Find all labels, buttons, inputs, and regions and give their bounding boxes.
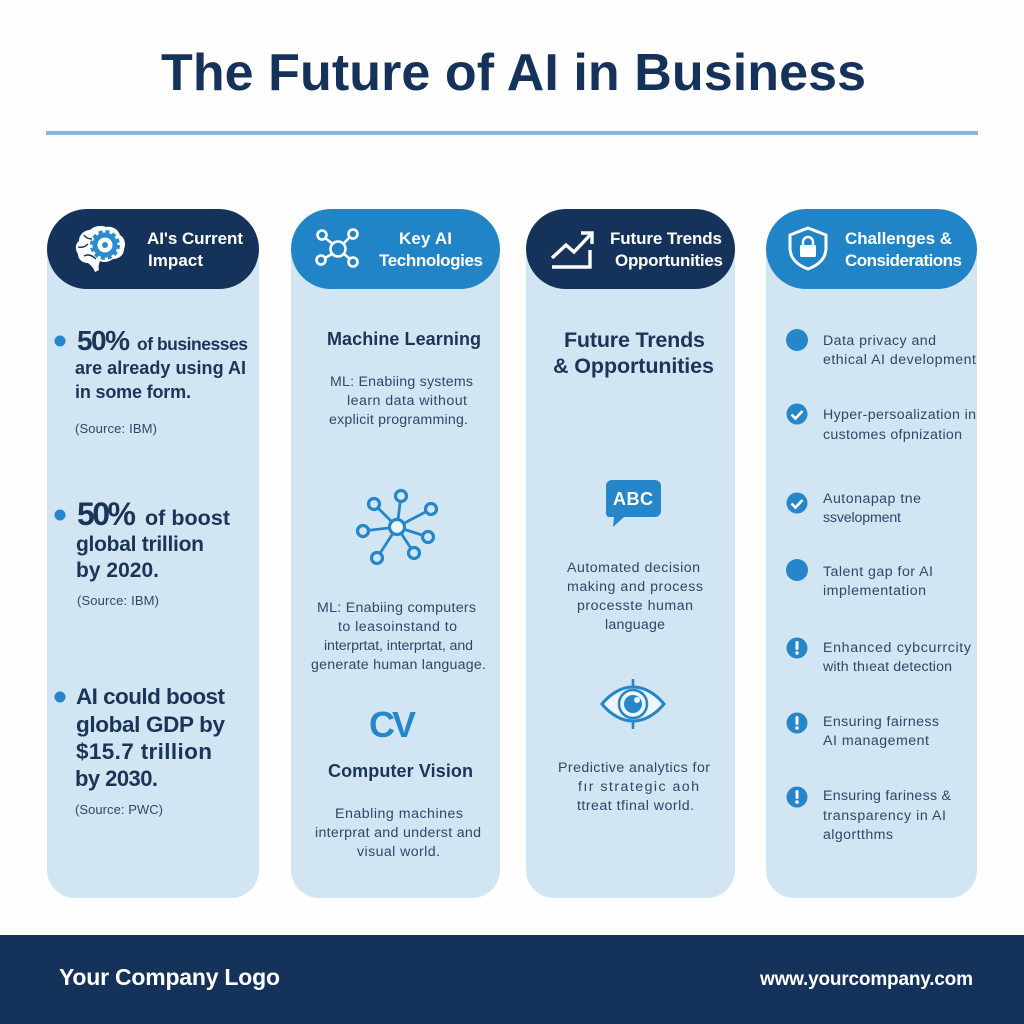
item: talent gap	[786, 559, 933, 599]
stat: 50% of boost: 50%	[77, 496, 136, 532]
item: fairness and transparency: algortthms	[823, 827, 893, 843]
item: hyper-personalization: Hyper-persoalization in	[823, 407, 976, 423]
text: computer vision: Enabling machines	[335, 806, 463, 822]
text: ML computers: to leasoinstand to	[338, 619, 457, 635]
text: automated decision: Automated decision	[567, 560, 700, 576]
footer url: www.yourcompany.com	[759, 969, 973, 990]
text: ML systems: learn data without	[347, 393, 467, 409]
header text: Challenges &	[845, 229, 952, 248]
heading: future trends: & Opportunities	[553, 354, 714, 378]
header text: Key AI	[399, 229, 452, 248]
stat: AI could boost GDP: global GDP by	[76, 712, 225, 737]
header text: Considerations	[845, 251, 962, 270]
icon: eye	[602, 679, 664, 729]
stat: 50% of businesses	[54, 325, 248, 436]
text: ML computers: interprtat, interprtat, and	[324, 638, 473, 654]
item: data privacy: Data privacy and	[823, 333, 936, 349]
header text	[610, 229, 723, 270]
item: autonomous development: ssvelopment	[823, 510, 901, 526]
text: predictive analytics: ttreat tfinal world.	[577, 798, 694, 814]
item: hyper-personalization: customes ofpnization	[823, 427, 962, 443]
text: predictive analytics: Predictive analytics for	[558, 760, 710, 776]
stat: 50% of businesses: (Source: IBM)	[75, 421, 157, 436]
item: AI management: Ensuring fairness	[823, 714, 939, 730]
text: ML computers: generate human language.	[311, 657, 486, 673]
header: key AI technologies	[291, 209, 500, 289]
header text: Opportunities	[615, 251, 723, 270]
panel: challenges	[766, 209, 977, 898]
panel: AI's current impact	[47, 209, 259, 898]
text: automated decision: making and process	[567, 579, 703, 595]
item: hyper-personalization	[786, 404, 976, 443]
header text	[147, 229, 243, 270]
item: cybersecurity	[786, 638, 972, 675]
heading: machine learning: Machine Learning	[327, 329, 481, 349]
stat: 50% of businesses: of businesses	[137, 334, 248, 354]
text: ML systems: ML: Enabiing systems	[330, 374, 473, 390]
item: autonomous development	[786, 491, 921, 526]
text: ML systems	[329, 374, 473, 428]
stat: 50% of boost: global trillion	[76, 533, 204, 556]
text: computer vision: interprat and underst and	[315, 825, 481, 841]
item: talent gap: implementation	[823, 583, 926, 599]
header: AI's current impact	[47, 209, 259, 289]
heading: computer vision: Computer Vision	[328, 761, 473, 781]
text: predictive analytics	[558, 760, 710, 814]
item: autonomous development: Autonapap tne	[823, 491, 921, 507]
heading: future trends: Future Trends	[564, 328, 705, 352]
stat: 50% of boost: of boost	[145, 506, 230, 530]
item: fairness and transparency	[786, 786, 952, 843]
stat: 50% of boost: (Source: IBM)	[77, 593, 159, 608]
text: computer vision	[315, 806, 481, 860]
item: talent gap: Talent gap for AI	[823, 564, 933, 580]
stat: AI could boost GDP	[54, 684, 226, 817]
text: ML computers	[311, 600, 486, 673]
item: fairness and transparency: Ensuring fariness &	[823, 788, 952, 804]
panel: future trends	[526, 209, 735, 898]
text: ML systems: explicit programming.	[329, 412, 468, 428]
item: cybersecurity: with thıeat detection	[822, 659, 952, 675]
text: automated decision: language	[605, 617, 665, 633]
heading: future trends	[553, 328, 714, 378]
header text: Impact	[148, 251, 203, 270]
footer logo text: Your Company Logo	[59, 964, 280, 990]
stat: 50% of boost	[54, 496, 230, 608]
icon: ABC speech bubble: ABC	[613, 489, 653, 509]
header text: Future Trends	[610, 229, 722, 248]
icon: neural network	[358, 490, 436, 564]
item: cybersecurity: Enhanced cybcurrcity	[823, 640, 972, 656]
stat: 50% of boost: by 2020.	[76, 559, 159, 582]
label: CV: CV	[369, 704, 416, 745]
item: fairness and transparency: transparency in AI	[823, 808, 946, 824]
icon: ABC speech bubble	[606, 480, 661, 527]
header text: Technologies	[379, 251, 483, 270]
stat: AI could boost GDP: $15.7 trillion	[76, 739, 212, 764]
header: future trends	[526, 209, 735, 289]
header: challenges	[766, 209, 977, 289]
stat: 50% of businesses: are already using AI	[75, 358, 246, 378]
header text: AI's Current	[147, 229, 243, 248]
stat: 50% of businesses: in some form.	[75, 382, 191, 402]
item: AI management	[786, 712, 939, 749]
icon: brain with gear	[76, 226, 125, 272]
stat: AI could boost GDP: (Source: PWC)	[75, 802, 163, 817]
icon: shield with lock	[790, 228, 826, 269]
item: data privacy: ethical AI development	[823, 352, 976, 368]
item: AI management: AI management	[823, 733, 929, 749]
title: The Future of AI in Business	[161, 44, 866, 102]
stat: 50% of businesses: 50%	[77, 325, 130, 356]
footer	[0, 935, 1024, 1024]
stat: AI could boost GDP: by 2030.	[75, 766, 158, 791]
item: data privacy	[786, 329, 976, 368]
header text	[845, 229, 962, 270]
stat: AI could boost GDP: AI could boost	[76, 684, 226, 709]
header text	[379, 229, 483, 270]
text: automated decision: processte human	[577, 598, 693, 614]
icon: network hub	[316, 230, 358, 266]
icon: rising chart	[552, 233, 592, 267]
text: computer vision: visual world.	[357, 844, 440, 860]
text: ML computers: ML: Enabiing computers	[317, 600, 476, 616]
text: automated decision	[567, 560, 703, 633]
text: predictive analytics: fır strategic aoh	[578, 779, 699, 795]
panel: key AI technologies	[291, 209, 500, 898]
